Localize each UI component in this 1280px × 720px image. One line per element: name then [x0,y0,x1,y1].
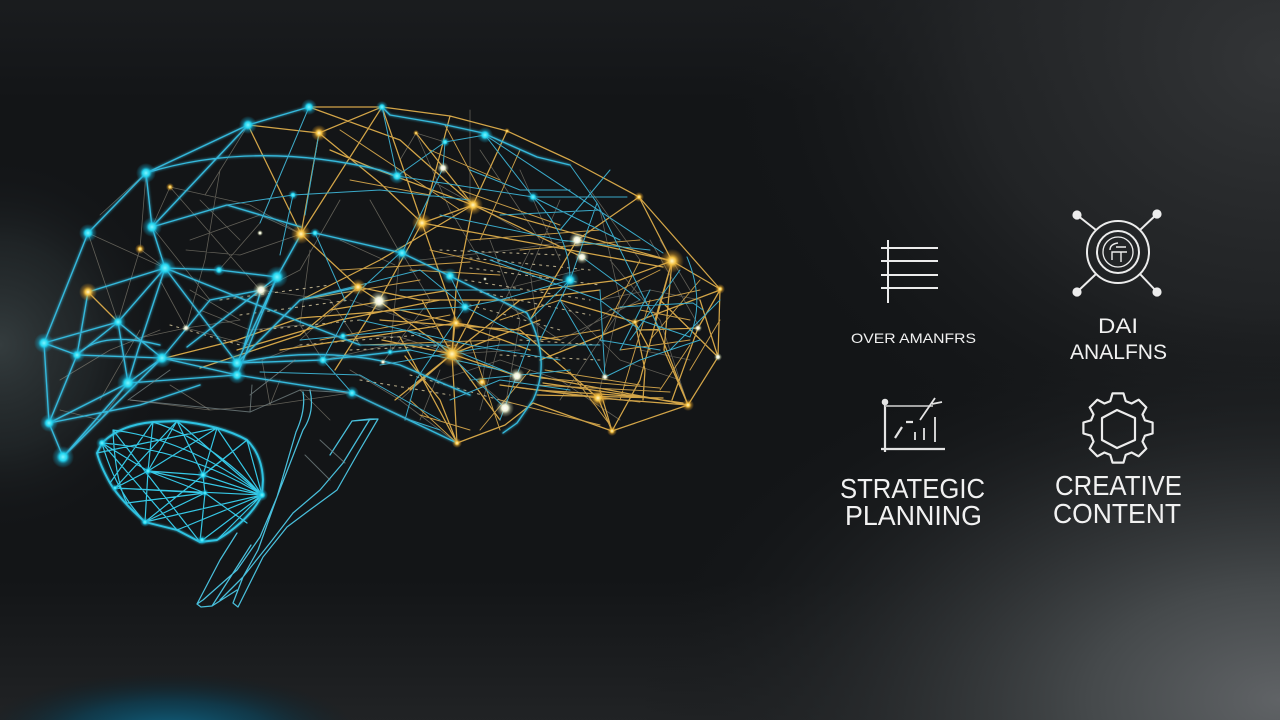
blue lines of the left cerebrum [44,107,570,457]
label: strategic planning: PLANNING [845,500,982,531]
label: creative content: CREATIVE [1055,470,1182,501]
icon: target network [1073,210,1161,296]
item: strategic planning [840,398,985,531]
brain network illustration [34,99,725,607]
label: data analysis: DAI [1098,315,1138,338]
label: over analysis: OVER AMANFRS [851,330,976,346]
network nodes [34,99,725,545]
label: strategic planning: STRATEGIC [840,473,985,504]
item: creative content [1053,393,1182,529]
icon: gear with hexagon [1083,393,1153,463]
extra gold detail lines [300,125,720,443]
item: over analysis [851,240,976,346]
label: data analysis: ANALFNS [1070,341,1167,364]
thin grey mesh of the cerebrum [60,107,700,443]
gold lines of the cerebrum [88,107,720,443]
item: data analysis [1070,210,1167,364]
label: creative content: CONTENT [1053,498,1181,529]
lower thin contour lines under the cerebrum [128,360,352,480]
cerebellum [97,421,263,542]
icon: growth chart [881,398,945,452]
icon: list lines [881,240,938,303]
thin blue lines of the central and right cerebrum [227,107,720,430]
brainstem [197,390,378,607]
speckled fine texture of the central cerebrum [170,250,600,400]
